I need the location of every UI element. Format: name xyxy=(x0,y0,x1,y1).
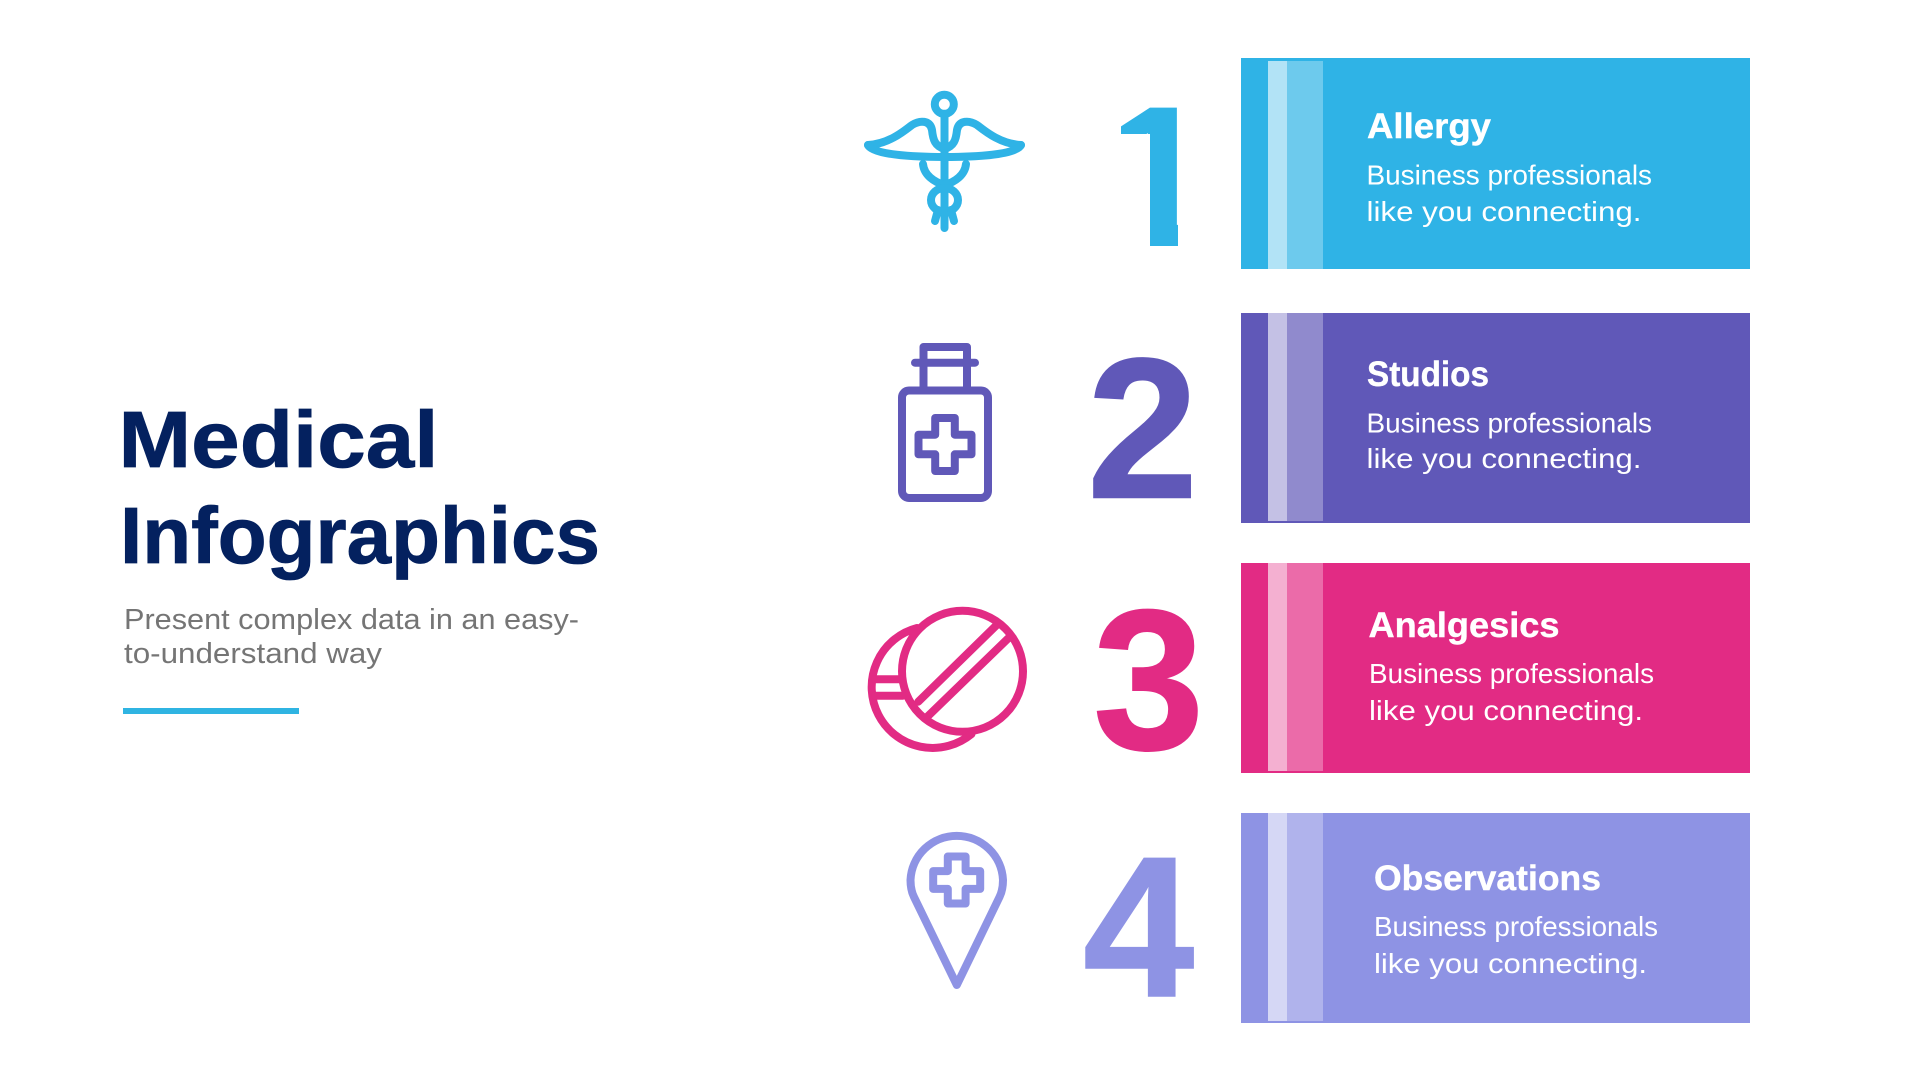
panel: Studios xyxy=(1241,313,1750,523)
heading: Analgesics xyxy=(1368,606,1560,645)
body text: like you connecting. xyxy=(1366,443,1642,474)
body text xyxy=(1374,911,1658,979)
light stripe xyxy=(1268,563,1287,771)
subtitle text: to-understand way xyxy=(124,638,383,670)
panel: Observations xyxy=(1241,813,1750,1023)
medium stripe xyxy=(1287,813,1323,1021)
medium stripe xyxy=(1287,61,1323,269)
heading: Allergy xyxy=(1367,107,1492,146)
light stripe xyxy=(1268,313,1287,521)
panel background xyxy=(1241,313,1750,523)
panel: Analgesics xyxy=(1241,563,1750,773)
number 4: 4 xyxy=(1083,816,1194,1039)
medium stripe xyxy=(1287,563,1323,771)
number 1: 1 xyxy=(1102,66,1213,289)
medium stripe xyxy=(1287,313,1323,521)
body text: like you connecting. xyxy=(1366,196,1642,227)
title xyxy=(118,395,600,580)
icon: pills xyxy=(872,611,1023,748)
body text: Business professionals xyxy=(1366,160,1652,190)
number 2: 2 xyxy=(1087,318,1198,540)
body text: like you connecting. xyxy=(1374,948,1647,979)
panel: Allergy xyxy=(1241,58,1750,269)
body text: Business professionals xyxy=(1369,658,1654,689)
heading: Observations xyxy=(1374,859,1601,898)
icon: medicine bottle xyxy=(902,347,988,498)
accent underline xyxy=(123,708,299,714)
body text: Business professionals xyxy=(1366,408,1652,438)
subtitle text: Present complex data in an easy- xyxy=(124,604,579,636)
panel background xyxy=(1241,563,1750,773)
body text: like you connecting. xyxy=(1369,695,1643,726)
infographic canvas xyxy=(123,58,1750,1023)
light stripe xyxy=(1268,813,1287,1021)
body text xyxy=(1366,408,1652,474)
subtitle text xyxy=(124,604,579,670)
panel background xyxy=(1241,813,1750,1023)
heading: Studios xyxy=(1367,355,1489,394)
body text: Business professionals xyxy=(1374,911,1658,942)
body text xyxy=(1366,160,1652,227)
icon: caduceus xyxy=(868,95,1021,228)
body text xyxy=(1369,658,1654,726)
number 3: 3 xyxy=(1093,569,1204,792)
panel background xyxy=(1241,58,1750,269)
light stripe xyxy=(1268,61,1287,269)
title: Medical xyxy=(118,395,438,484)
icon: location pin with cross xyxy=(910,836,1003,985)
title: Infographics xyxy=(120,491,600,580)
